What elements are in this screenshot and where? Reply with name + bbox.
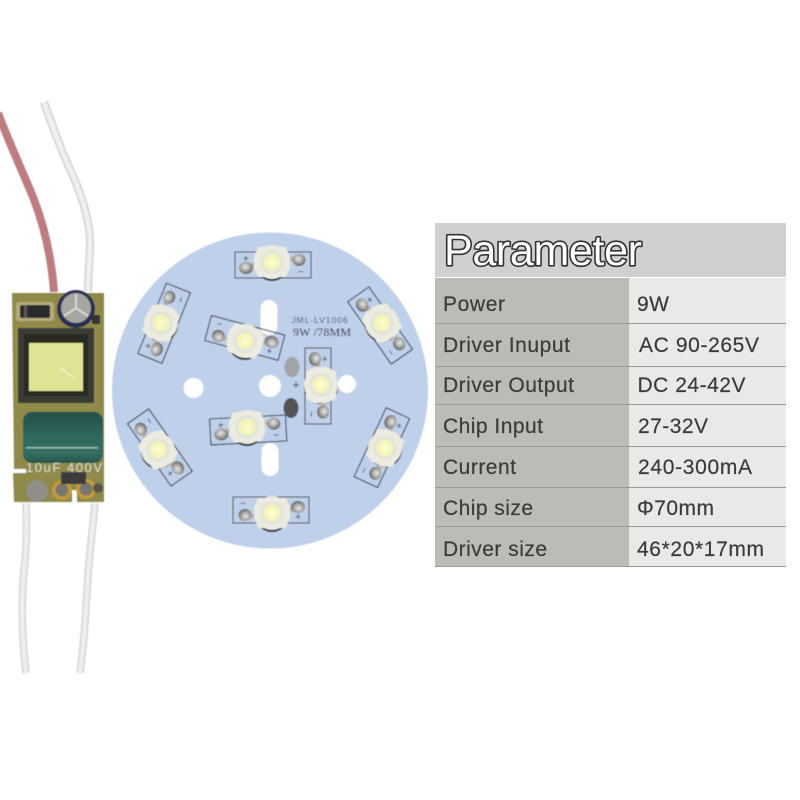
row: Current: Current (443, 456, 516, 479)
row: Power (443, 293, 669, 316)
LED: lower left: − (144, 415, 156, 426)
LED: bottom: − (240, 497, 246, 508)
mounting holes and slots (184, 300, 356, 476)
film capacitor (23, 412, 103, 475)
row: Driver Output (443, 374, 746, 397)
row: Current: 240-300mA (638, 456, 752, 479)
LED: lower right (353, 407, 416, 491)
LED: upper left: − (175, 295, 188, 305)
LED: inner lower (209, 408, 287, 446)
label column (435, 278, 629, 567)
transformer (18, 328, 94, 403)
row: Driver size: 46*20*17mm (637, 538, 764, 561)
diode (16, 302, 54, 321)
LED: top: − (298, 267, 304, 278)
LED: centre right: − (305, 411, 316, 417)
wire: red input (0, 113, 54, 292)
solder pads (284, 357, 300, 418)
row: Driver size: Driver size (443, 538, 547, 561)
LED: lower left: + (165, 467, 177, 478)
wire: white output left (22, 503, 27, 673)
wire: white output right (80, 503, 95, 673)
row: Driver Output: Driver Output (443, 374, 574, 397)
LED: inner lower: + (218, 420, 224, 432)
row: Driver Inuput: AC 90-265V (639, 334, 759, 357)
LED: inner left (203, 314, 285, 367)
LED: lower right: − (357, 465, 369, 475)
LED: top: + (243, 254, 249, 265)
LED: upper right: + (363, 295, 375, 306)
LED: bottom (233, 496, 309, 532)
LED: centre right: + (318, 356, 329, 362)
row: Chip size: Chip size (443, 497, 533, 520)
row: Chip size: Φ70mm (637, 497, 714, 520)
driver circuit board (12, 290, 104, 502)
board spec label: 9W /78MM (293, 325, 351, 339)
row: Chip Input (443, 415, 708, 438)
row: Driver Output: DC 24-42V (638, 374, 746, 397)
row: Driver size (443, 538, 764, 561)
small electrolytic capacitor (57, 290, 100, 328)
row: Power: Power (443, 293, 505, 316)
LED: top (235, 245, 311, 281)
LED: upper right (347, 283, 418, 365)
row: Power: 9W (637, 293, 669, 316)
row: Chip Input: Chip Input (443, 415, 543, 438)
value column (629, 278, 786, 567)
row: Chip size (443, 497, 714, 520)
polarity mark: + (292, 377, 300, 392)
row: Driver Inuput: Driver Inuput (443, 334, 570, 357)
table heading: Parameter (444, 227, 642, 275)
board disc (112, 232, 428, 548)
table header band (435, 223, 786, 277)
LED: lower right: + (392, 420, 405, 431)
LED: upper left: + (143, 341, 155, 351)
film capacitor: 10uF 400V (26, 460, 102, 475)
LED: inner left: + (265, 344, 274, 356)
row: Driver Inuput (443, 334, 759, 357)
LED: bottom: + (295, 510, 301, 521)
row: Chip Input: 27-32V (638, 415, 708, 438)
LED: upper left (131, 280, 191, 364)
wire: white input (44, 102, 90, 292)
board model label: JML-LV1006 (292, 315, 348, 325)
round LED aluminium board photo (112, 232, 428, 548)
LED: upper right: − (384, 347, 396, 358)
output components (12, 469, 103, 502)
LED: centre right (304, 348, 338, 424)
LED driver module photo (0, 102, 104, 673)
LED: lower left (122, 408, 193, 490)
parameter table (435, 223, 786, 567)
LED: inner left: − (215, 317, 224, 329)
LED: inner lower: − (273, 430, 280, 442)
row: Current (443, 456, 752, 479)
